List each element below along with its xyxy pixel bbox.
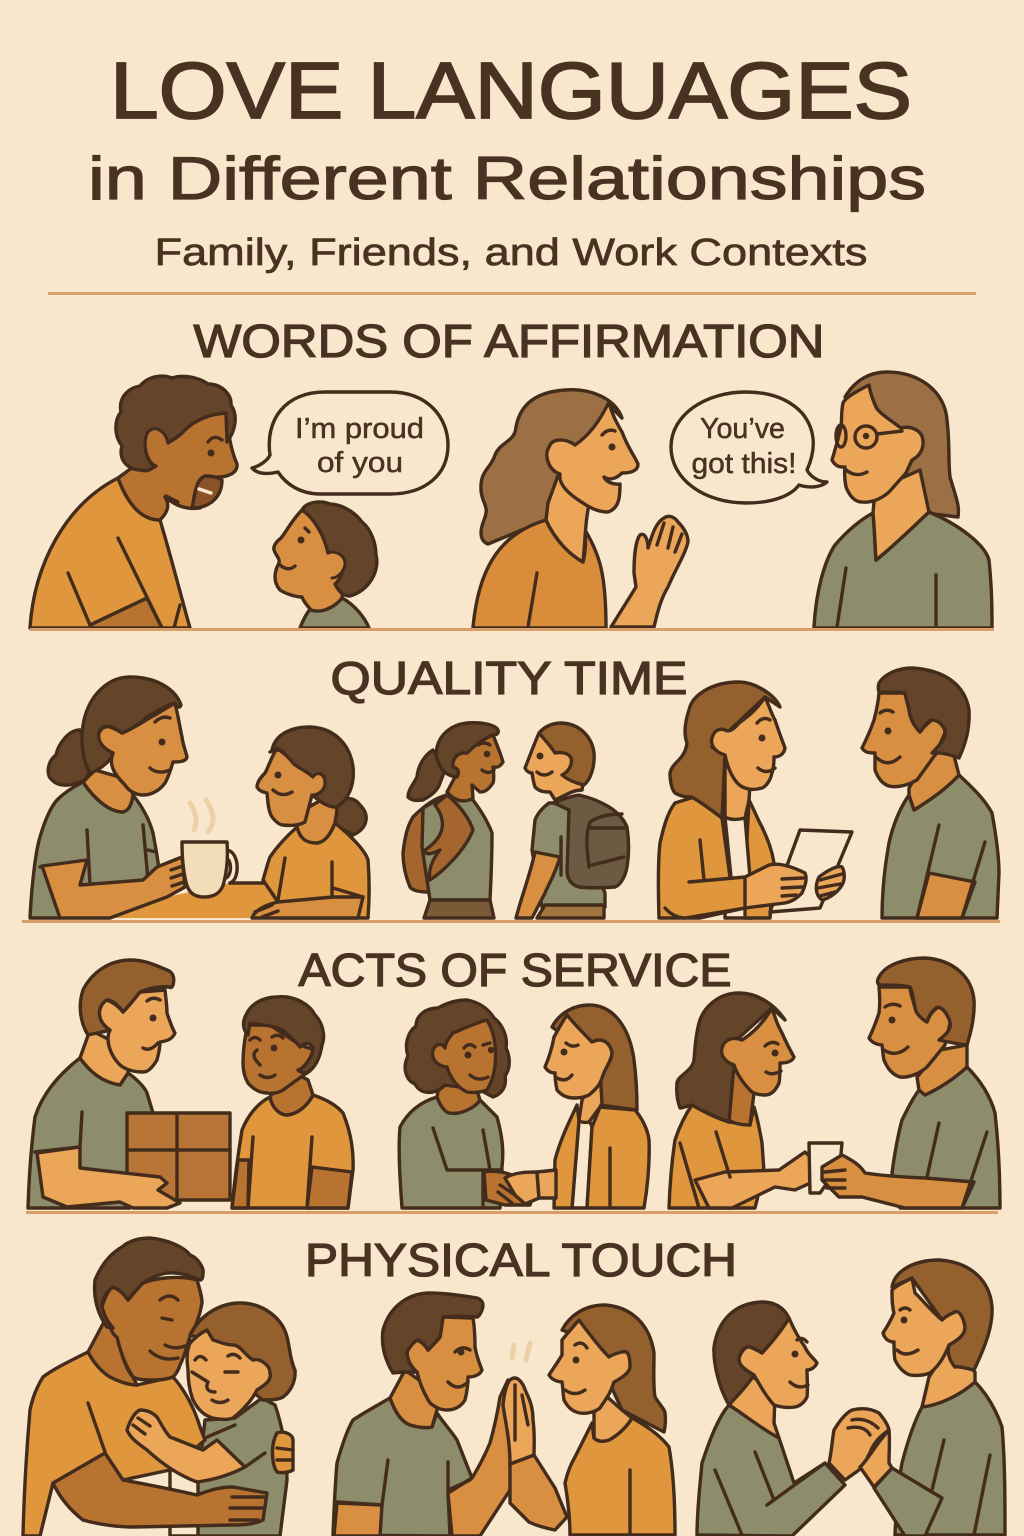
heading: physical touch: PHYSICAL TOUCH [305,1234,737,1286]
icon: parcel box [127,1113,230,1200]
figure: daughter [252,727,369,918]
figure: man high-five [333,1293,520,1536]
panel: physical touch scenes [23,1238,1005,1536]
figure: mother with mug [30,677,187,918]
icon: handshake [484,1171,539,1205]
panel: quality time scenes [30,668,999,918]
heading: words of affirmation: WORDS OF AFFIRMATION [194,315,824,367]
tagline: Family, Friends, and Work Contexts [154,232,868,274]
figure: friend with ponytail [403,723,503,918]
heading: quality time: QUALITY TIME [330,652,688,704]
icon: sparkle marks [512,1343,530,1360]
figure: child in hug [127,1303,295,1482]
callout: I'm proud of you [252,392,448,494]
figure: child body behind [182,1398,287,1536]
figure: mother's arm and hand [42,857,185,918]
figure: father [30,376,237,628]
table [110,883,290,918]
figure: woman with curly hair [399,1000,509,1208]
figure: boy receiving [232,997,353,1208]
callout: I'm proud of you: of you [317,447,403,479]
figure: woman with raised hand [473,390,688,628]
figure: woman handing item [669,993,817,1208]
figure: colleague man [862,668,999,918]
panel: acts of service scenes [28,958,1000,1208]
title: LOVE LANGUAGES [110,46,912,135]
heading: acts of service: ACTS OF SERVICE [298,944,732,996]
figure: woman with glasses [814,372,992,628]
subtitle: in Different Relationships [88,145,926,212]
callout: You've got this!: got this! [692,448,796,480]
callout: I'm proud of you: I’m proud [295,413,424,445]
figure: man with box [28,960,175,1208]
figure: woman in cardigan [537,1005,649,1208]
figure: friend holding hands right [848,1260,1005,1536]
figure: friend with backpack [516,723,628,918]
figure: child [274,502,377,628]
figure: father hugging child [23,1238,267,1536]
callout: You've got this!: You’ve [700,413,785,445]
figure: friend holding hands left [697,1302,889,1536]
figure: father's hand on child's back [272,1432,293,1473]
callout: You've got this! [671,392,827,503]
figure: man receiving card [822,958,1000,1208]
figure: colleague with clipboard [658,682,852,918]
icon: coffee mug [171,800,237,897]
icon: small card [809,1143,842,1193]
figure: woman high-five [503,1305,675,1535]
figure: man's arm and hand [37,1147,180,1208]
panel: words of affirmation scenes [30,372,992,628]
